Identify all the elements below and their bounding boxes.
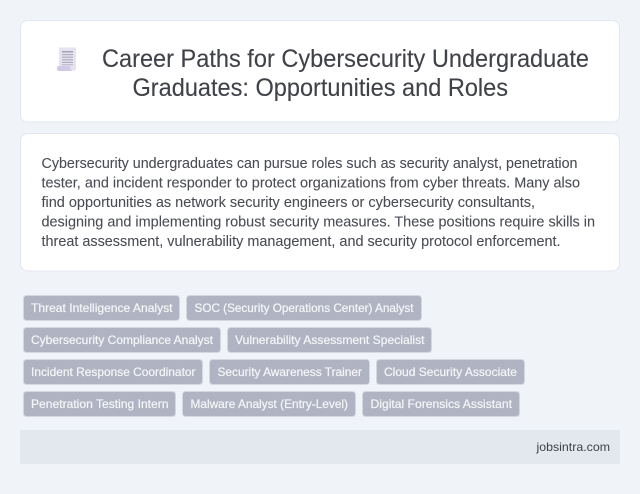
tag: Threat Intelligence Analyst — [24, 296, 180, 320]
summary text — [42, 156, 595, 250]
tag: Cybersecurity Compliance Analyst — [24, 328, 220, 352]
tag: SOC Analyst — [186, 296, 422, 320]
footer source text: jobsintra.com — [535, 440, 610, 454]
tag: Malware Analyst (Entry-Level) — [182, 392, 356, 416]
footer bar — [20, 430, 620, 464]
tag: Incident Response Coordinator: Incident Response Coordinator — [31, 365, 196, 379]
icon: document scroll — [57, 48, 76, 71]
tag: Vulnerability Assessment Specialist — [228, 328, 432, 352]
panel: summary card — [20, 134, 620, 271]
tag: Penetration Testing Intern: Penetration Testing Intern — [31, 397, 168, 411]
tag: Threat Intelligence Analyst: Threat Intelligence Analyst — [31, 301, 173, 315]
summary text: Cybersecurity undergraduates can pursue roles such as security analyst, penetration — [42, 156, 578, 172]
summary text: find opportunities as network security engineers or cybersecurity consultants, — [42, 195, 535, 211]
tag: Cloud Security Associate — [376, 360, 524, 384]
tag: Digital Forensics Assistant — [362, 392, 520, 416]
summary text: threat assessment, vulnerability management, and security protocol enforcement. — [42, 234, 560, 250]
tag: Penetration Testing Intern — [24, 392, 176, 416]
summary text: tester, and incident responder to protect organizations from cyber threats. Many also — [42, 176, 580, 192]
title text — [102, 45, 589, 102]
summary text: designing and implementing robust security measures. These positions require skills in — [42, 214, 595, 230]
tag: SOC Analyst: SOC (Security Operations Center) Analyst — [194, 301, 414, 315]
title text: Graduates: Opportunities and Roles — [132, 74, 508, 102]
tag: Digital Forensics Assistant: Digital Forensics Assistant — [370, 397, 513, 411]
tag: Security Awareness Trainer — [210, 360, 370, 384]
tag: Malware Analyst (Entry-Level): Malware Analyst (Entry-Level) — [190, 397, 348, 411]
tag: Vulnerability Assessment Specialist: Vulnerability Assessment Specialist — [235, 333, 425, 347]
tag: Cybersecurity Compliance Analyst: Cybersecurity Compliance Analyst — [31, 333, 214, 347]
panel: role tags — [24, 296, 524, 416]
tag: Incident Response Coordinator — [24, 360, 202, 384]
tag: Cloud Security Associate: Cloud Security Associate — [384, 365, 517, 379]
title text: Career Paths for Cybersecurity Undergraduate — [102, 45, 589, 73]
tag: Security Awareness Trainer: Security Awareness Trainer — [218, 365, 362, 379]
panel: title card — [20, 20, 620, 122]
